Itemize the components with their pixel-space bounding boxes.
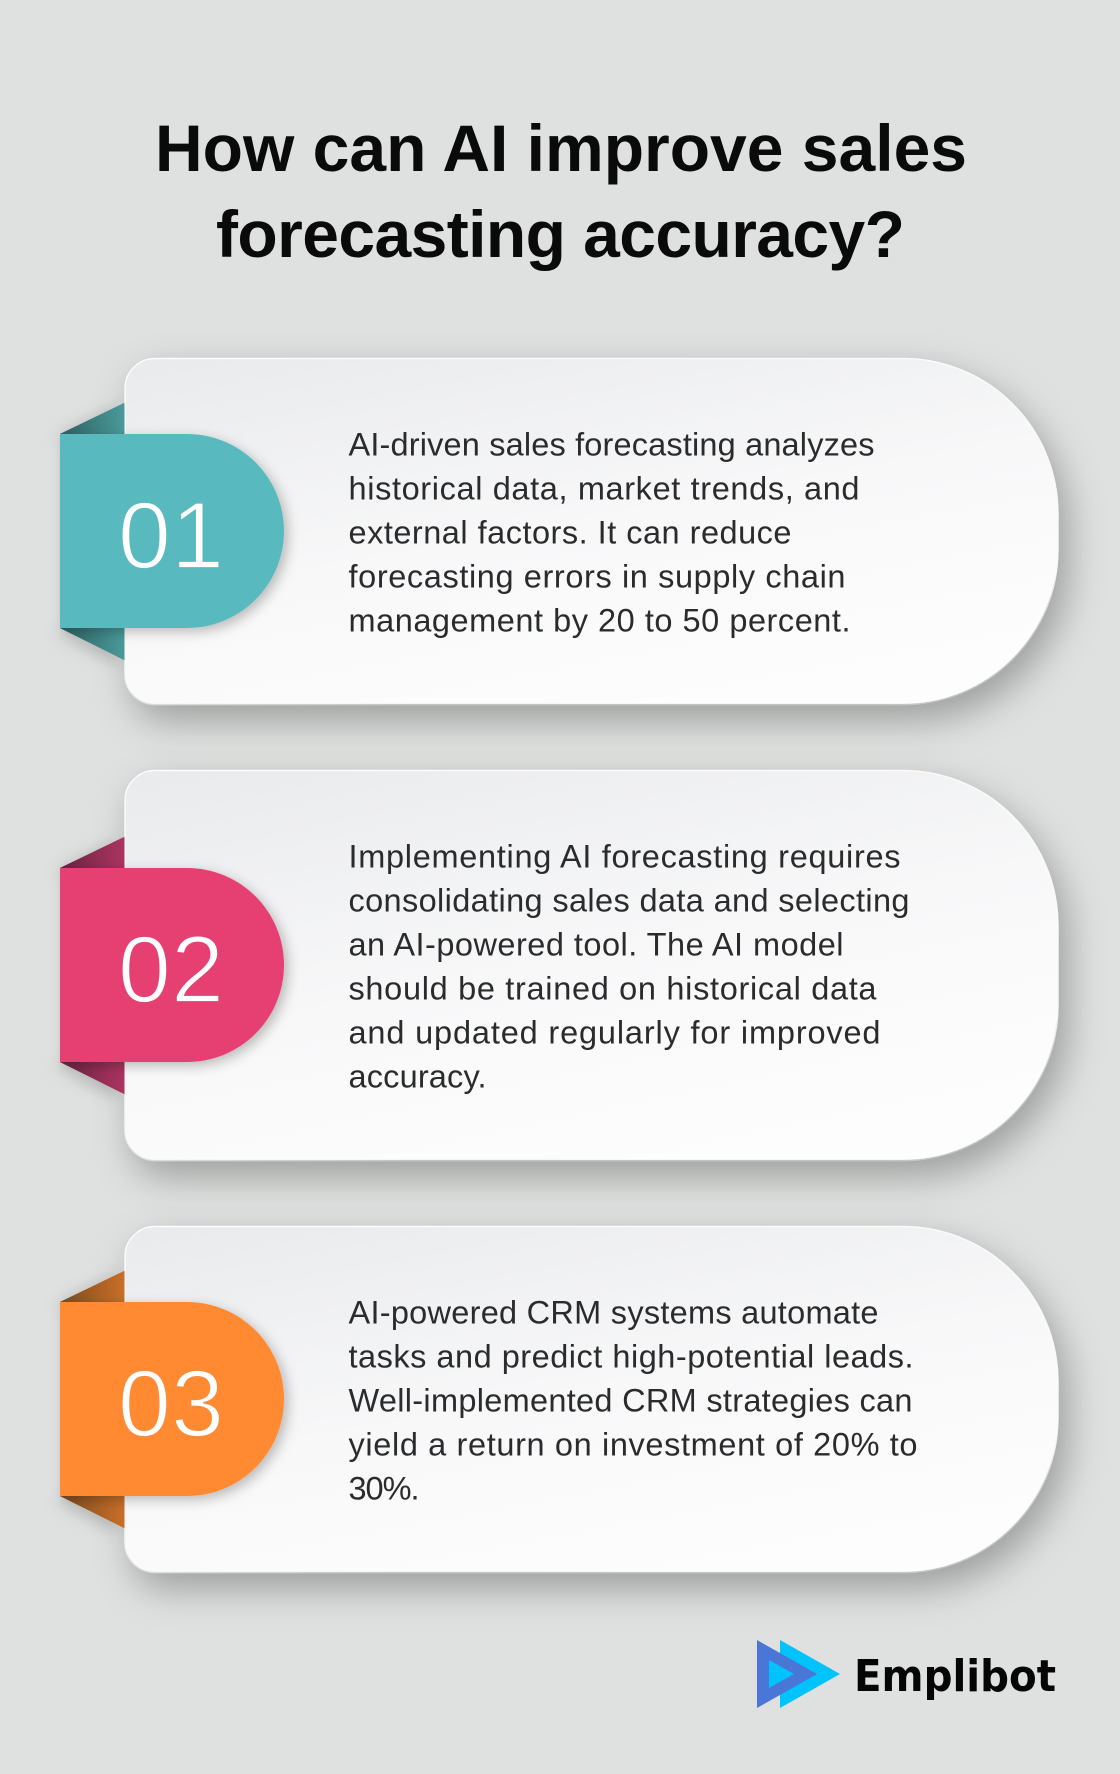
text block 02: an AI-powered tool. The AI model — [348, 926, 844, 962]
text block 02: Implementing AI forecasting requires — [348, 838, 900, 874]
icon: ribbon folds 02 — [60, 837, 124, 1094]
text block 01 — [348, 426, 874, 638]
icon: ribbon folds 03 — [60, 1271, 124, 1528]
text block 02: and updated regularly for improved — [348, 1014, 880, 1050]
badge 01 — [60, 434, 284, 628]
logo: Emplibot — [757, 1640, 1056, 1708]
text block 02: consolidating sales data and selecting — [348, 882, 910, 918]
ribbon folds redraw over card edge 01 — [60, 403, 124, 660]
text block 03: tasks and predict high-potential leads. — [348, 1338, 914, 1374]
ribbon folds redraw over card edge 03 — [60, 1271, 124, 1528]
title — [155, 111, 967, 271]
panel: step 02 — [60, 770, 1058, 1160]
title: forecasting accuracy? — [216, 197, 905, 271]
panel: step 01 — [60, 358, 1058, 704]
ribbon folds redraw over card edge 02 — [60, 837, 124, 1094]
badge 02 — [60, 868, 284, 1062]
number 01: 01 — [118, 483, 224, 589]
text block 03: 30%. — [348, 1470, 420, 1506]
card 02 — [125, 770, 1058, 1160]
icon: ribbon folds 01 — [60, 403, 124, 660]
number 02: 02 — [118, 917, 224, 1023]
text block 03: Well-implemented CRM strategies can — [348, 1382, 912, 1418]
logo wordmark: Emplibot — [854, 1651, 1056, 1702]
panel: step 03 — [60, 1226, 1058, 1572]
text block 01: AI-driven sales forecasting analyzes — [348, 426, 874, 462]
text block 03 — [348, 1294, 918, 1506]
text block 03: AI-powered CRM systems automate — [348, 1294, 878, 1330]
text block 01: forecasting errors in supply chain — [348, 558, 846, 594]
card 01 — [125, 358, 1058, 704]
text block 01: management by 20 to 50 percent. — [348, 602, 850, 638]
badge 03 — [60, 1302, 284, 1496]
text block 02: accuracy. — [348, 1058, 486, 1094]
number 03: 03 — [118, 1351, 224, 1457]
text block 01: historical data, market trends, and — [348, 470, 860, 506]
text block 02 — [348, 838, 910, 1094]
text block 02: should be trained on historical data — [348, 970, 877, 1006]
card 03 — [125, 1226, 1058, 1572]
title: How can AI improve sales — [155, 111, 967, 185]
text block 01: external factors. It can reduce — [348, 514, 792, 550]
text block 03: yield a return on investment of 20% to — [348, 1426, 918, 1462]
icon: play triangles — [757, 1640, 840, 1708]
